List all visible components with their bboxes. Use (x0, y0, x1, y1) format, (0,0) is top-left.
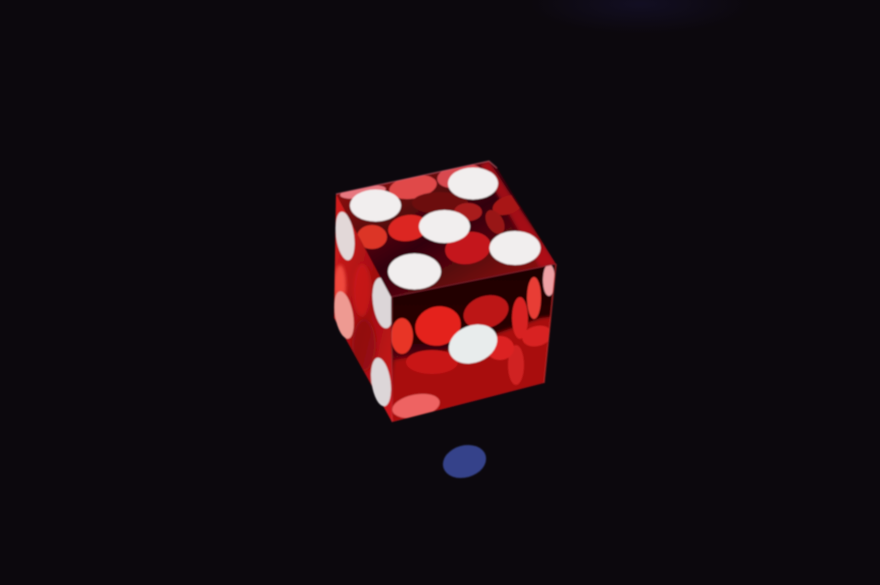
left face (331, 194, 396, 422)
blue reflection spot (439, 440, 490, 483)
pip (331, 290, 357, 340)
pip (448, 168, 498, 200)
pip (333, 210, 357, 262)
pip (350, 190, 401, 222)
top edge glow (530, 0, 750, 34)
front-right face (390, 264, 556, 422)
pip (419, 210, 470, 243)
pip (388, 254, 441, 290)
top face (336, 160, 556, 297)
die (331, 160, 556, 422)
photo: red translucent die on black background (333, 0, 709, 479)
pip (490, 231, 540, 265)
pip (443, 317, 503, 371)
pip (368, 356, 394, 408)
edge highlights (336, 161, 556, 422)
pip (370, 276, 396, 330)
